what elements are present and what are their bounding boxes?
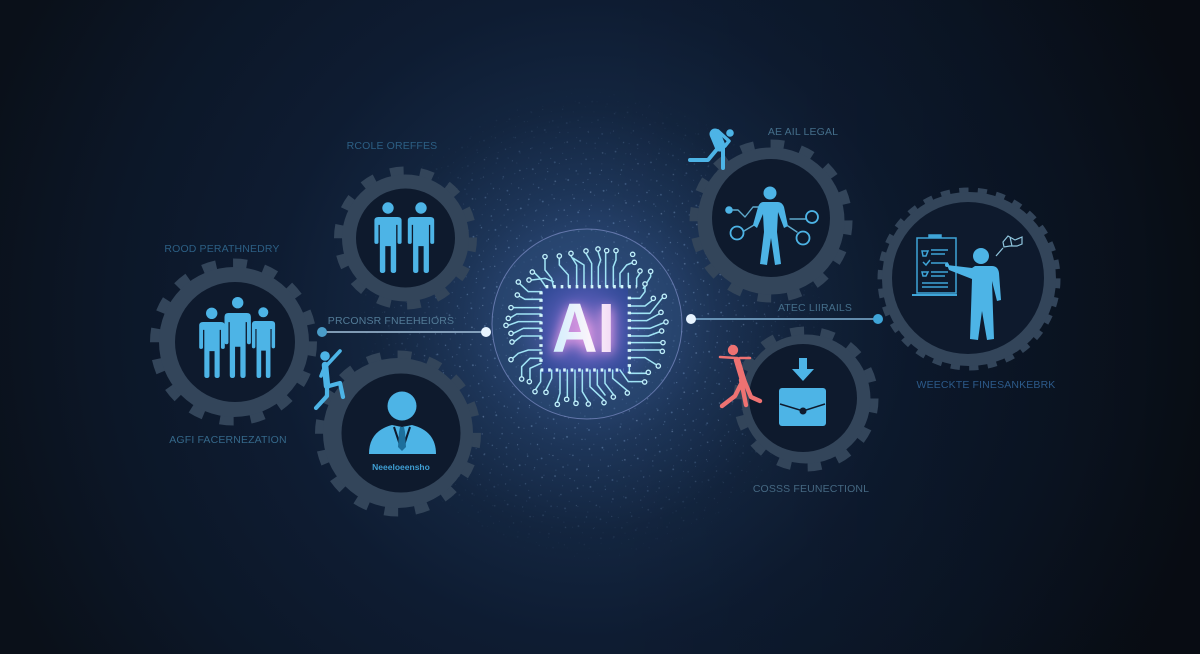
icon: person with network nodes [725, 186, 818, 265]
climber: blue figure left [316, 351, 343, 408]
chip body [542, 288, 628, 373]
caption inside gear: Neeeloeensho [372, 462, 430, 472]
particle field [364, 101, 814, 545]
label: legal: AE AIL LEGAL [768, 126, 838, 138]
label: process: PRCONSR FNEEHEIORS [328, 315, 454, 327]
circuit traces [504, 247, 668, 406]
label: agile: AGFI FACERNEZATION [169, 434, 287, 446]
icon: presenter [945, 236, 1022, 340]
icon: business person [369, 392, 436, 454]
AI text glow: AI [550, 293, 616, 367]
label: road partnership: ROOD PERATHNEDRY [164, 243, 280, 255]
icon: briefcase [779, 388, 826, 426]
outer ring [492, 229, 682, 419]
central AI chip [492, 229, 682, 419]
gear: roles and profiles [338, 171, 472, 305]
AI text: AI [552, 289, 615, 367]
gear: road partnership team [155, 264, 312, 420]
label: cross functional: COSSS FEUNECTIONL [753, 483, 869, 495]
label: framework: WEECKTE FINESANKEBRK [917, 379, 1055, 391]
climber: blue figure top right [690, 129, 734, 168]
icon: down arrow [792, 358, 814, 381]
icon: three people [199, 297, 275, 378]
figure: pink walker [720, 345, 760, 406]
gear: AI legal [694, 144, 848, 298]
gear: weekly framework [880, 190, 1058, 368]
icon: two people [374, 202, 434, 273]
icon: clipboard checklist [912, 235, 957, 295]
connector: left [317, 327, 491, 337]
gear: cross functional [738, 331, 874, 467]
gear: business leader [320, 355, 476, 512]
chip glow [510, 255, 660, 405]
label: tech: ATEC LIIRAILS [778, 302, 852, 314]
connector: right [686, 314, 883, 324]
label: roles: RCOLE OREFFES [347, 140, 437, 152]
